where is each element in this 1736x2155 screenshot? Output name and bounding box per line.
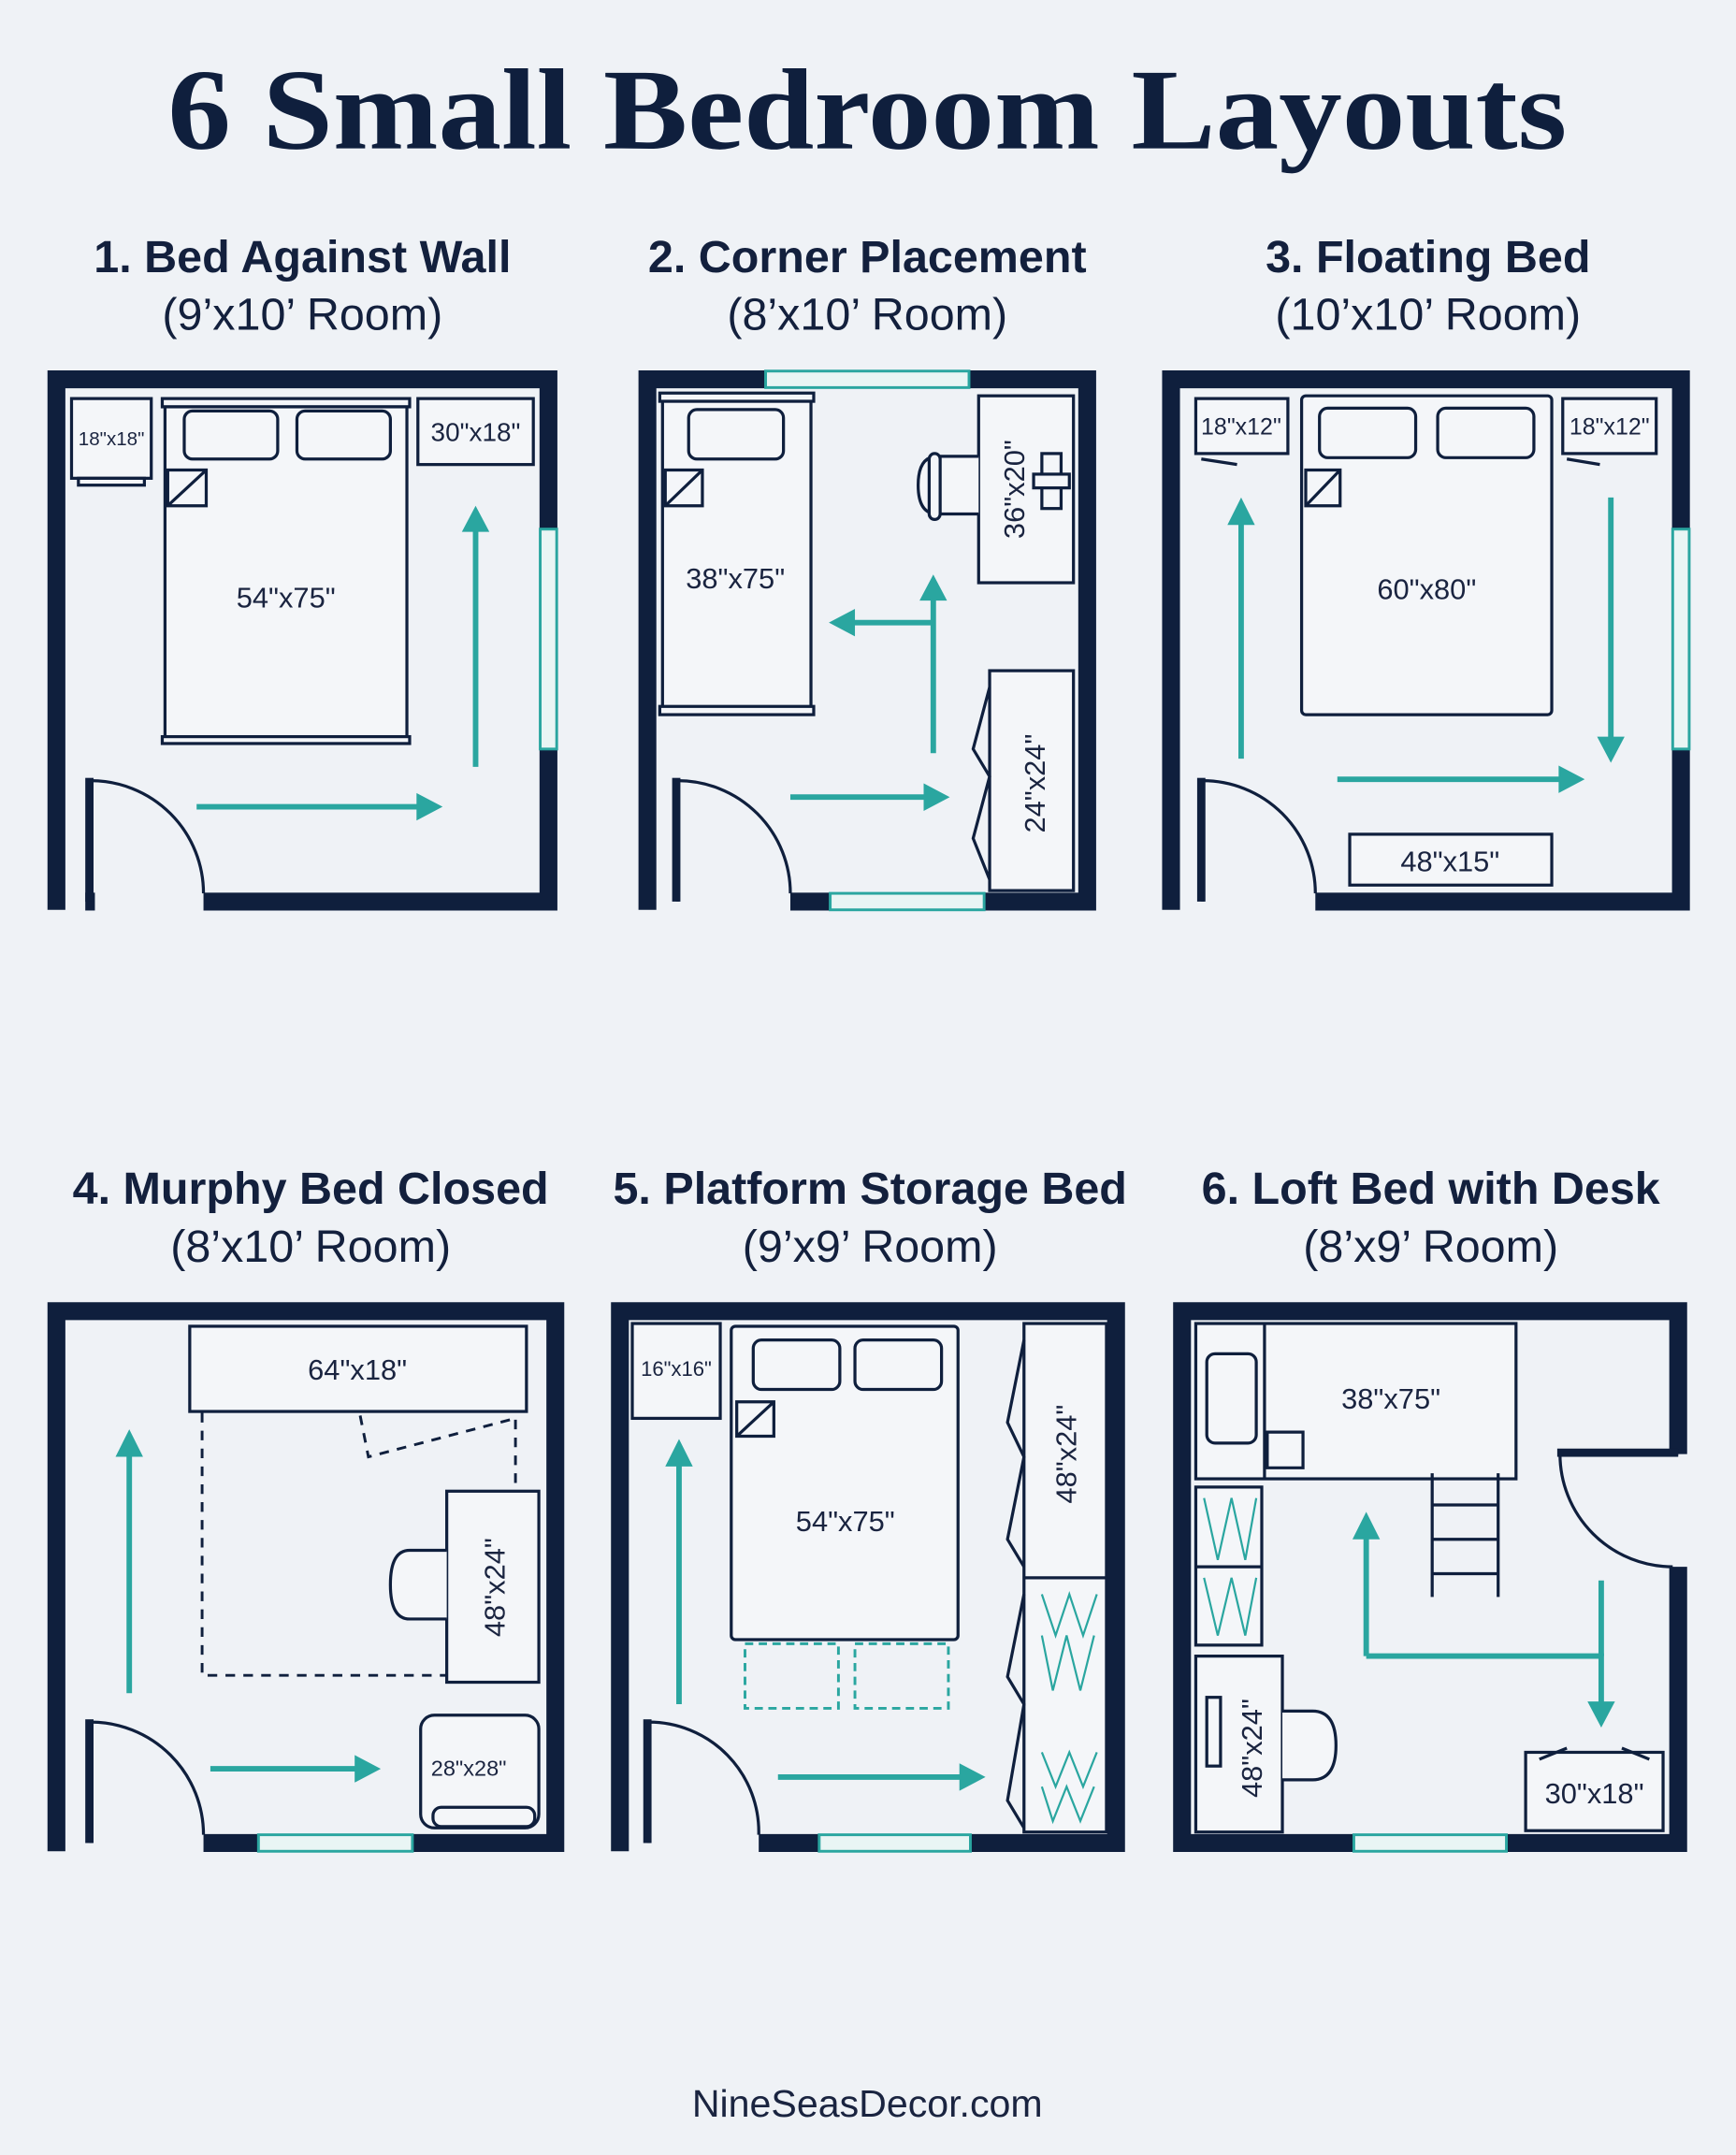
heading 1 (94, 232, 511, 340)
nightstands 3: 18"x12" (1570, 413, 1650, 440)
arrows 4 (116, 1429, 381, 1783)
arrows 6 (1353, 1511, 1615, 1728)
loft bed 6 (1195, 1323, 1516, 1597)
nightstands 3 (1195, 398, 1656, 465)
nightstand 1 (71, 398, 152, 485)
desk 2 (919, 396, 1074, 583)
wardrobe 5: 48"x24" (1050, 1405, 1083, 1504)
heading 4 (73, 1164, 549, 1272)
cabinet 4: 64"x18" (308, 1353, 407, 1386)
armchair 4: 28"x28" (431, 1756, 507, 1780)
bed 1 (162, 398, 410, 744)
heading 1: (9’x10’ Room) (162, 290, 442, 340)
door 6 (1557, 1449, 1678, 1567)
panel: layout 6 (1182, 1164, 1678, 1851)
heading 2: (8’x10’ Room) (727, 290, 1007, 340)
heading 3: (10’x10’ Room) (1275, 290, 1581, 340)
heading 6: (8’x9’ Room) (1303, 1222, 1558, 1272)
cabinet 4 (190, 1326, 527, 1675)
heading 3 (1266, 232, 1590, 340)
bed 2 (659, 393, 814, 715)
nightstand 5 (632, 1323, 720, 1418)
heading 6 (1202, 1164, 1660, 1272)
nightstands 3: 18"x12" (1201, 413, 1281, 440)
dresser 1 (418, 398, 533, 465)
arrows 1 (196, 506, 489, 820)
bed 5 (731, 1326, 958, 1708)
desk 2: 36"x20" (998, 440, 1031, 539)
heading 2 (648, 232, 1087, 340)
footer: NineSeasDecor.com (692, 2082, 1043, 2125)
desk 4: 48"x24" (478, 1538, 511, 1637)
panel: layout 3 (1171, 232, 1689, 910)
bed 3: 60"x80" (1377, 573, 1476, 606)
panel: layout 4 (56, 1164, 556, 1851)
bed 1: 54"x75" (237, 581, 336, 614)
heading 5: 5. Platform Storage Bed (613, 1164, 1127, 1214)
heading 5: (9’x9’ Room) (743, 1222, 998, 1272)
heading 2: 2. Corner Placement (648, 232, 1087, 282)
shelving 6 (1195, 1487, 1262, 1645)
wardrobe 5 (1007, 1323, 1107, 1832)
panel: layout 1 (56, 232, 557, 910)
heading 6: 6. Loft Bed with Desk (1202, 1164, 1660, 1214)
bench 3 (1350, 834, 1552, 885)
door 3 (1197, 778, 1315, 902)
arrows 2 (790, 574, 949, 811)
arrows 5 (665, 1439, 986, 1791)
heading 4: 4. Murphy Bed Closed (73, 1164, 549, 1214)
bed 3 (1302, 396, 1552, 715)
desk 6: 48"x24" (1236, 1699, 1268, 1798)
armchair 4 (421, 1715, 539, 1828)
dresser 6: 30"x18" (1545, 1777, 1644, 1810)
panel: layout 5 (613, 1164, 1127, 1851)
panel: layout 2 (647, 232, 1087, 910)
nightstand 5: 16"x16" (641, 1357, 712, 1381)
heading 4: (8’x10’ Room) (170, 1222, 451, 1272)
heading 1: 1. Bed Against Wall (94, 232, 511, 282)
arrows 3 (1227, 498, 1625, 793)
desk 4 (390, 1491, 539, 1683)
door 1 (85, 778, 204, 902)
heading 3: 3. Floating Bed (1266, 232, 1590, 282)
bed 2: 38"x75" (686, 562, 785, 595)
door 4 (85, 1719, 204, 1843)
heading 5 (613, 1164, 1127, 1272)
door 5 (644, 1719, 759, 1843)
bench 3: 48"x15" (1400, 846, 1499, 878)
dresser 2: 24"x24" (1019, 734, 1051, 833)
dresser 1: 30"x18" (431, 418, 520, 447)
nightstand 1: 18"x18" (79, 428, 144, 450)
dresser 2 (973, 671, 1074, 890)
bed 5: 54"x75" (796, 1505, 895, 1538)
dresser 6 (1526, 1748, 1663, 1830)
title: 6 Small Bedroom Layouts (167, 46, 1567, 174)
door 2 (673, 778, 790, 902)
loft bed 6: 38"x75" (1341, 1382, 1440, 1415)
desk 6 (1195, 1656, 1336, 1832)
